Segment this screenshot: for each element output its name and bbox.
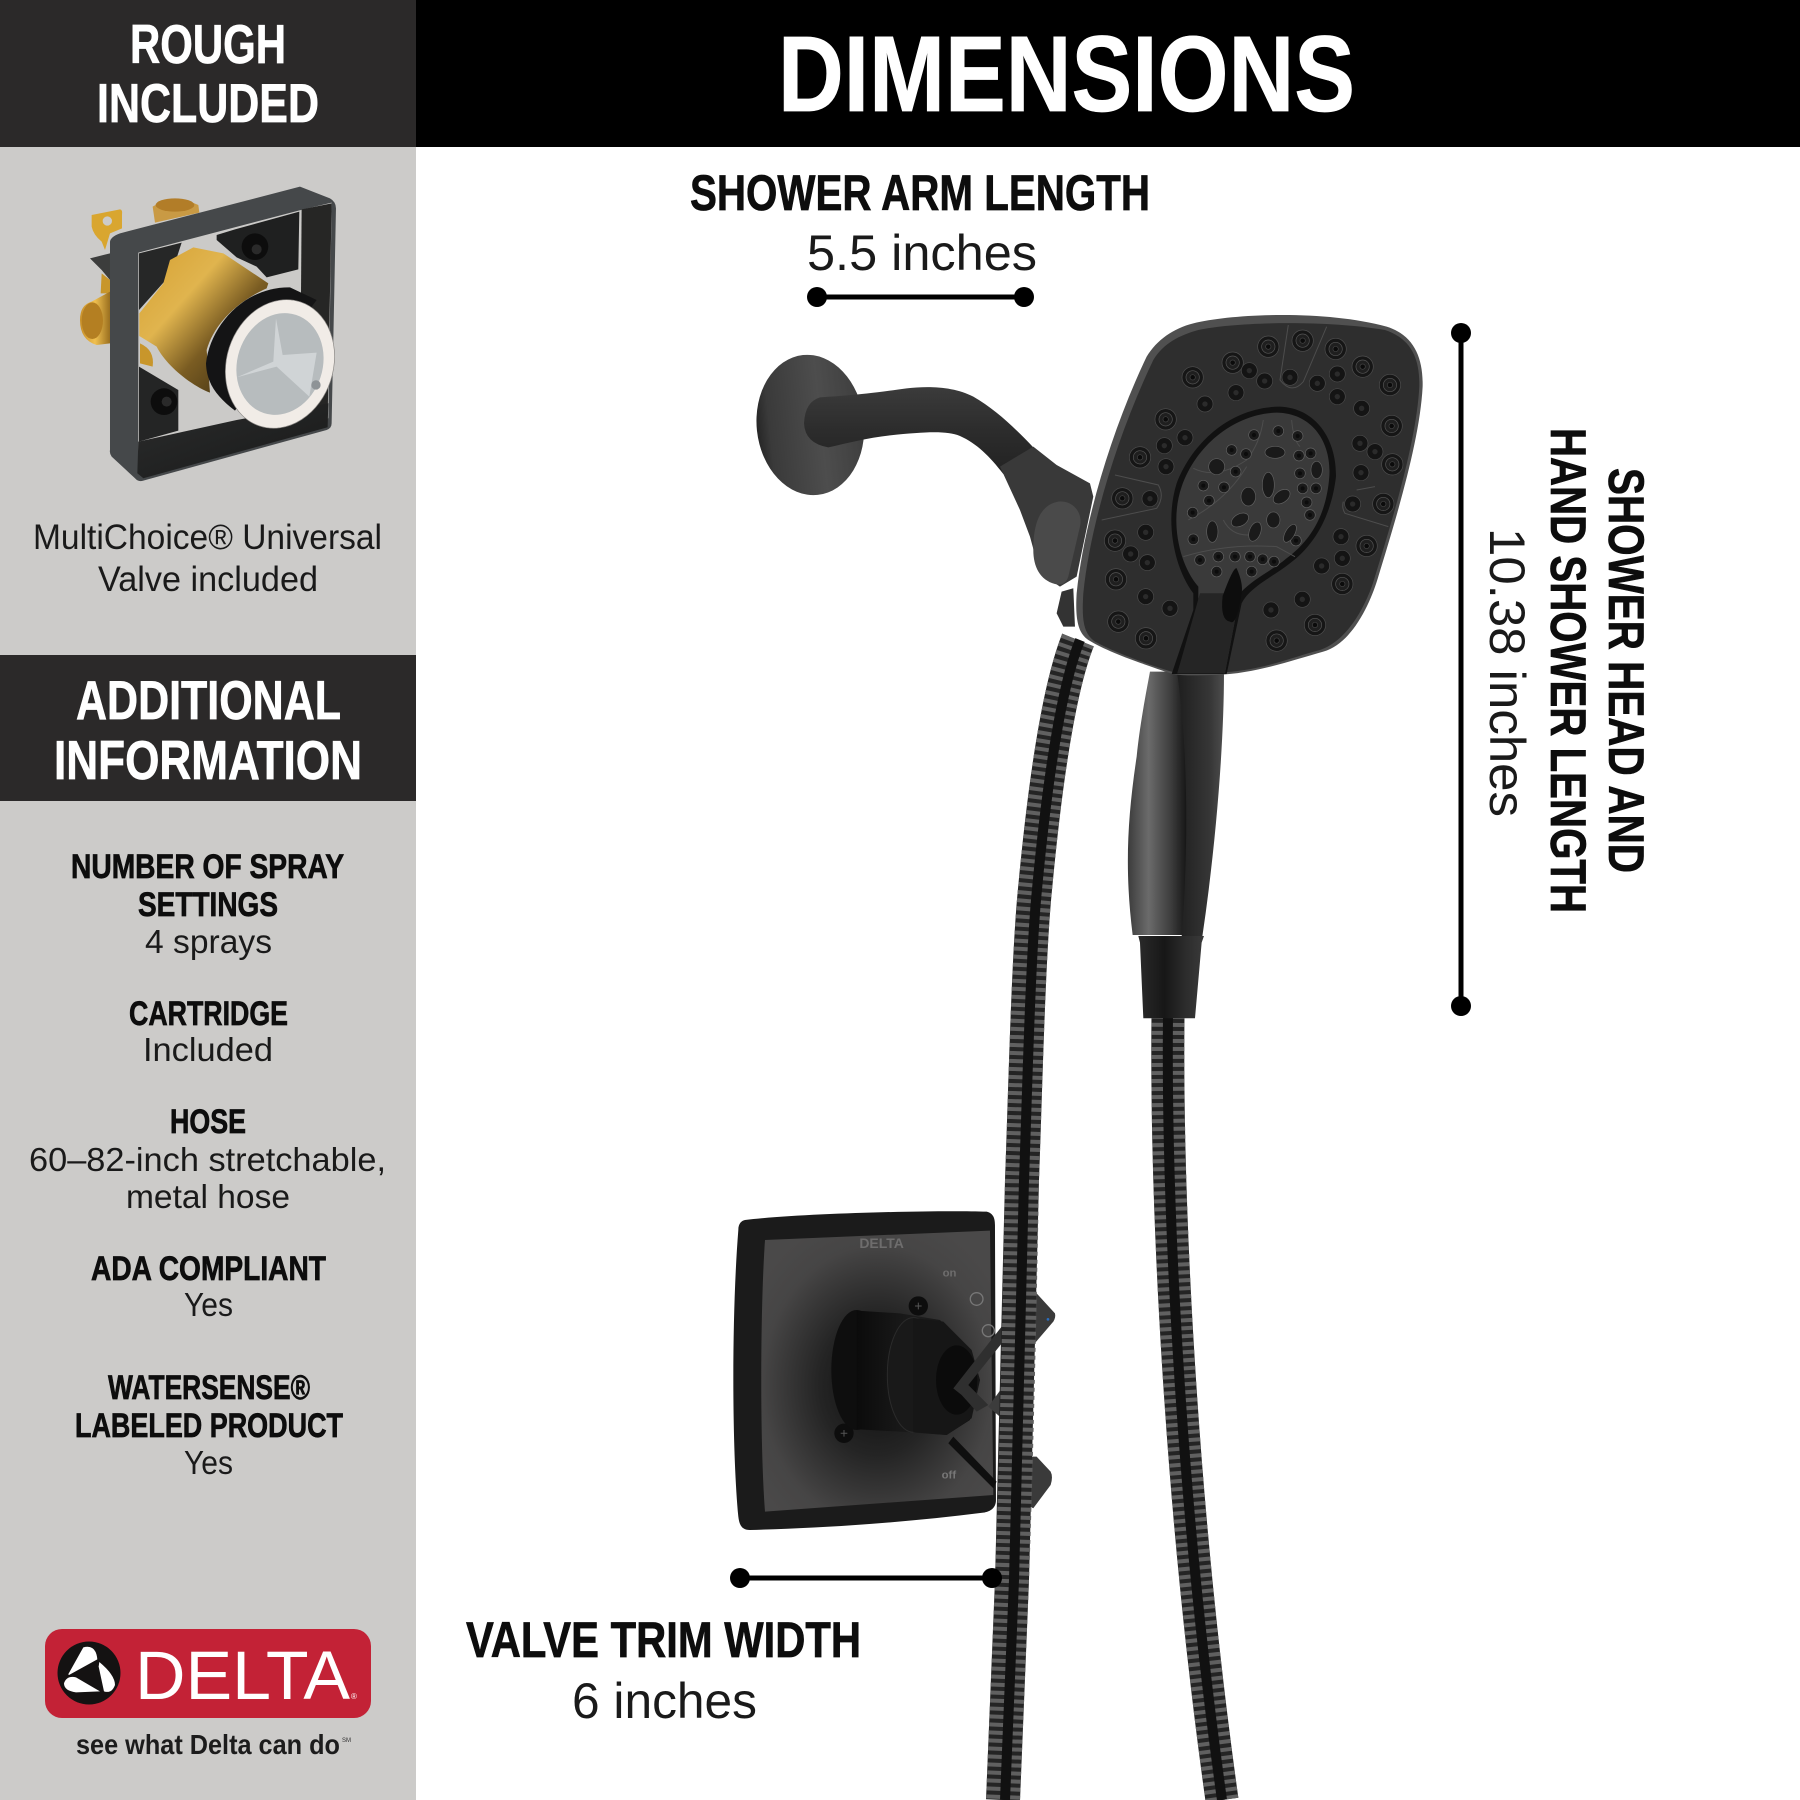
text: spray settings: 4 sprays [145,923,272,960]
text: spray settings [71,848,344,960]
text: cartridge: Included [143,1031,273,1068]
icon: rough-in valve [80,187,351,481]
heading band: dimensions [416,0,1800,147]
heading band: additional information [0,655,416,801]
label: shower head and hand shower length [1479,428,1654,913]
text: valve caption: Valve included [98,560,318,599]
heading band: rough included [0,0,416,147]
heading band: rough included: INCLUDED [97,72,319,134]
arrow: valve trim dimension [730,1568,1002,1588]
illustration: shower valve trim [733,1211,1055,1530]
text: ADA compliant [91,1250,326,1323]
logo: Delta: ® [351,1692,357,1701]
text: hose: metal hose [126,1178,290,1215]
logo: Delta: see what Delta can do [76,1729,340,1760]
text: WaterSense: LABELED PRODUCT [75,1407,343,1445]
text: WaterSense [75,1369,343,1481]
logo: Delta: DELTA [135,1637,350,1714]
illustration: shower valve trim: DELTA [859,1235,904,1251]
arrow: shower arm dimension [807,287,1034,307]
logo: Delta: SM [342,1738,351,1744]
heading band: additional information: ADDITIONAL [76,669,341,731]
label: shower head and hand shower length: SHOWER HEAD AND [1598,468,1654,873]
text: cartridge: CARTRIDGE [129,995,288,1033]
text: hose [29,1103,386,1215]
label: shower arm length [690,165,1150,281]
arrow: head and hand shower dimension [1451,323,1471,1016]
label: shower head and hand shower length: 10.38 inches [1479,528,1535,817]
heading band: dimensions: DIMENSIONS [778,13,1355,134]
text: ADA compliant: ADA COMPLIANT [91,1250,326,1288]
label: shower arm length: SHOWER ARM LENGTH [690,165,1150,221]
label: valve trim width: VALVE TRIM WIDTH [466,1612,861,1668]
text: spray settings: NUMBER OF SPRAY [71,848,344,886]
text: valve caption: MultiChoice® Universal [33,518,382,557]
illustration: shower valve trim: off [942,1469,956,1481]
label: shower arm length: 5.5 inches [807,225,1037,281]
label: valve trim width: 6 inches [572,1673,757,1729]
illustration: left flexible hose [1003,640,1080,1800]
heading band: rough included: ROUGH [130,13,286,75]
illustration: right flexible hose [1168,1015,1222,1800]
illustration: shower head [1076,315,1423,675]
text: spray settings: SETTINGS [138,886,278,924]
logo: Delta [45,1629,371,1760]
illustration: shower arm and flange [750,349,1093,627]
text: valve caption [33,518,382,599]
text: hose: HOSE [170,1103,246,1141]
heading band: additional information: INFORMATION [54,729,362,791]
text: cartridge [129,995,288,1068]
illustration: hand shower handle [1128,670,1224,1018]
text: ADA compliant: Yes [184,1286,233,1323]
label: shower head and hand shower length: HAND SHOWER LENGTH [1540,428,1596,913]
text: WaterSense: WATERSENSE® [108,1369,310,1407]
illustration: shower valve trim: on [943,1268,957,1280]
text: WaterSense: Yes [184,1444,233,1481]
panel: sidebar background [0,147,416,1800]
text: hose: 60–82-inch stretchable, [29,1141,386,1178]
label: valve trim width [466,1612,861,1729]
